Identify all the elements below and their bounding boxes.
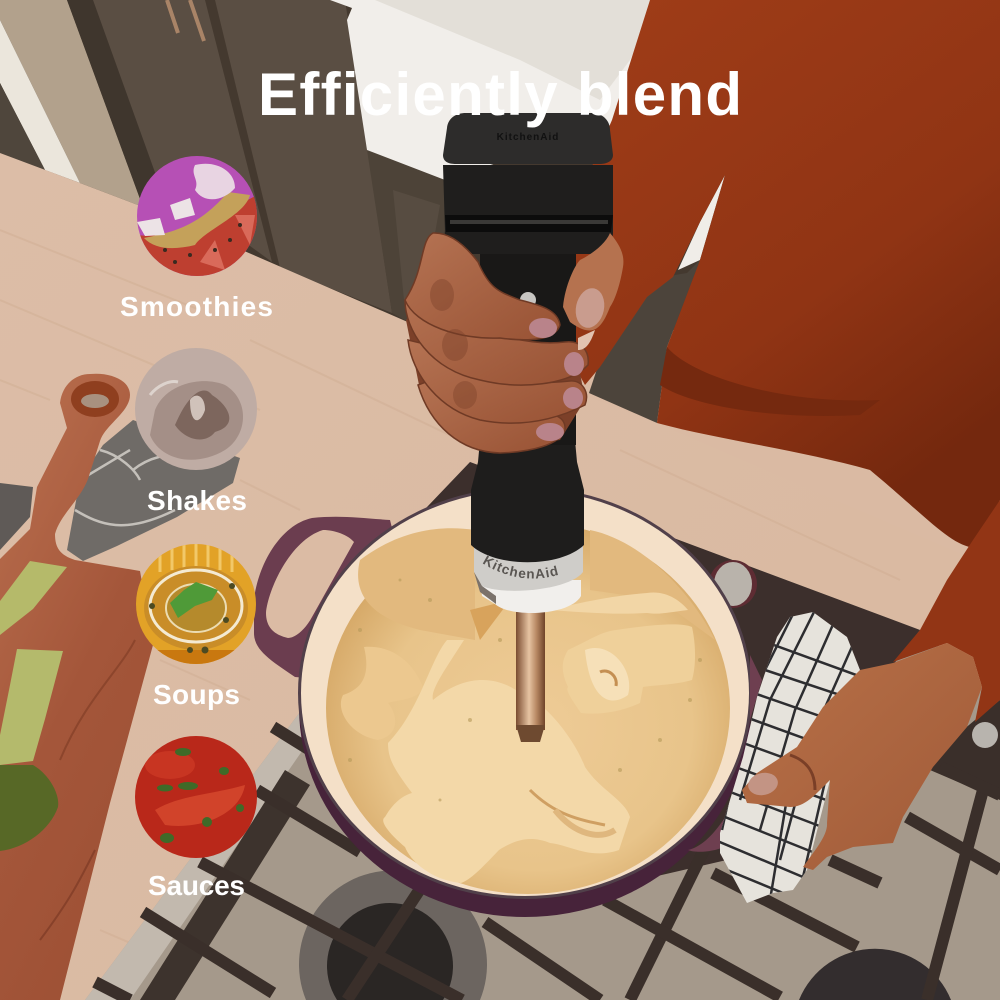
enamel pot — [254, 487, 762, 917]
kitchen background: wall and cabinets — [0, 0, 1000, 423]
stove top — [85, 462, 1000, 1000]
food circle: shakes — [135, 348, 257, 470]
title: Efficiently blend — [258, 61, 742, 128]
food circle: sauces — [135, 736, 257, 858]
sweater torso and left sleeve — [560, 0, 1000, 548]
food circle: soups — [136, 544, 256, 664]
label: Sauces: Sauces — [148, 870, 245, 901]
right hand holding pot — [742, 643, 982, 870]
right sleeve cuff — [893, 500, 1000, 722]
KitchenAid logo on collar: KitchenAid — [482, 556, 558, 579]
soup foam folds — [341, 528, 715, 883]
immersion blender — [443, 113, 613, 742]
hand gripping blender — [405, 233, 623, 453]
label: Smoothies: Smoothies — [120, 291, 273, 322]
label: Shakes: Shakes — [147, 485, 247, 516]
cutting board — [0, 374, 153, 1000]
checked towel — [720, 612, 860, 903]
KitchenAid logo on blender head: KitchenAid — [497, 132, 559, 143]
grey striped cloth under board — [0, 420, 240, 561]
broccoli — [0, 561, 67, 851]
white sink — [330, 0, 725, 270]
label: Soups: Soups — [153, 679, 240, 710]
food circle: smoothies — [137, 156, 257, 277]
